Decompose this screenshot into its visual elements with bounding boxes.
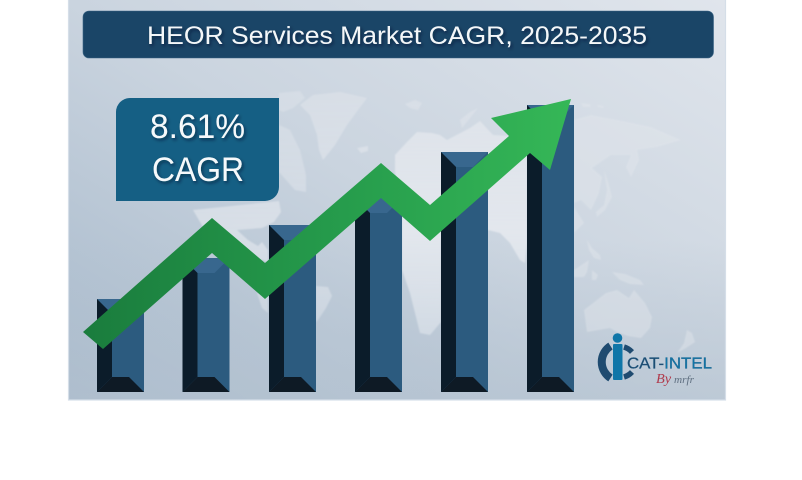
map: Sumatra and Java — [592, 270, 598, 280]
panel: background — [68, 0, 726, 400]
bar chart — [97, 105, 574, 392]
title bar — [83, 11, 714, 58]
bar 3 — [269, 225, 316, 392]
title: HEOR Services Market CAGR, 2025-2035 — [147, 22, 647, 50]
world map: west and centre — [193, 91, 527, 335]
bar 5 — [441, 152, 488, 392]
logo: CAT-INTEL by mrfr — [602, 333, 712, 387]
logo tagline: By mrfr — [656, 372, 695, 387]
map: Australia — [584, 290, 652, 338]
map: Northern Russian coast — [460, 108, 478, 128]
map: Iceland — [357, 146, 368, 153]
map: North America — [193, 201, 281, 262]
bar 6 — [527, 105, 574, 392]
callout: CAGR — [116, 98, 279, 201]
map: South America — [257, 290, 268, 313]
map: Greenland — [300, 92, 367, 160]
map: Arctic islands — [581, 103, 591, 107]
map: Europe and Central Asia — [395, 121, 527, 335]
world map: east — [574, 103, 695, 353]
arrow: growth trend — [83, 99, 571, 349]
bar 1 — [97, 299, 144, 392]
bar 4 — [355, 198, 402, 392]
logo mark — [602, 333, 632, 380]
map: Svalbard — [405, 100, 422, 110]
logo wordmark: CAT-INTEL — [627, 356, 712, 372]
map: Southeast Asia — [574, 207, 584, 233]
callout value: 8.61% — [150, 108, 245, 146]
map: Canadian arctic — [279, 91, 305, 112]
map: New Guinea — [612, 272, 644, 285]
map: Japan — [596, 170, 612, 217]
map: Philippines — [587, 240, 601, 260]
map: Borneo — [574, 260, 589, 277]
map: New Zealand — [677, 330, 695, 353]
bar 2 — [182, 258, 230, 392]
callout label: CAGR — [152, 151, 244, 189]
map: East Asia — [574, 115, 681, 210]
